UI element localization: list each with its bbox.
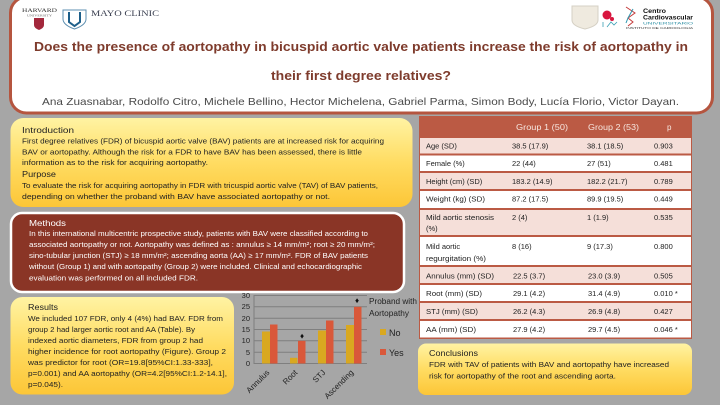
table labels: Weight (kg) (SD) [426, 194, 486, 204]
table p values: 0.046 * [654, 325, 678, 334]
text: methods body: associated aortopathy or not. Aortopathy was defined as : annulus ≥ 14 mm/m²; root ≥ 20 mm/m²; [29, 240, 375, 249]
logo: Centro Cardiovascular: Cardiovascular [643, 16, 694, 22]
text: results body: was predictor for root (OR=19.8[95%CI:1.33-333], [27, 358, 213, 367]
chart y axis labels: 25 [242, 302, 250, 311]
table group 2 values: 89.9 (19.5) [587, 194, 624, 204]
table header: Group 2 (53) [588, 123, 639, 132]
chart bars: with aortopathy [270, 307, 362, 364]
chart x axis labels: STJ [311, 368, 327, 384]
text: results body: group 2 had larger aortic root and AA (Table). By [28, 325, 195, 334]
table group 1 values: 27.9 (4.2) [513, 325, 546, 334]
table labels: STJ (mm) (SD) [426, 307, 479, 316]
chart y axis labels: 20 [242, 314, 250, 323]
logo: Centro Cardiovascular: UNIVERSITARIO [643, 20, 693, 26]
table labels: Mild aortic [426, 242, 460, 251]
text: methods body: In this international multicentric prospective study, patients with BAV were classified according to [29, 229, 368, 238]
table group 2 values: 29.7 (4.5) [588, 325, 621, 334]
table p values: 0.789 [654, 177, 673, 186]
logo: Harvard: UNIVERSITY [27, 14, 53, 18]
text: methods body [28, 229, 375, 282]
table header [516, 123, 672, 132]
chart bars: no aortopathy [262, 325, 354, 364]
table p values: 0.505 [654, 272, 673, 280]
chart legend [369, 297, 417, 358]
table group 1 values: 29.1 (4.2) [513, 289, 546, 298]
text: conclusions body: risk for aortopathy of the root and ascending aorta. [429, 372, 616, 380]
logo: Harvard: HARVARD [22, 8, 57, 14]
significance markers [300, 296, 359, 340]
table p values: 0.800 [654, 242, 673, 251]
chart y axis labels: 0 [246, 359, 250, 368]
logo: university seal [572, 6, 598, 29]
chart legend: Aortopathy [369, 309, 409, 318]
logo: red society mark [602, 10, 617, 27]
table group 1 values: 22 (44) [512, 159, 536, 168]
heading: introduction: Introduction [22, 125, 74, 135]
table labels: AA (mm) (SD) [426, 325, 477, 334]
table group 1 values: 8 (16) [512, 242, 532, 251]
chart y axis labels: 10 [242, 336, 250, 345]
chart legend: Proband with [369, 297, 417, 306]
table group 2 values: 23.0 (3.9) [588, 272, 621, 280]
table group 1 values: 2 (4) [512, 213, 528, 222]
significance markers: ♦ [300, 332, 304, 340]
table group 2 values: 26.9 (4.8) [588, 307, 621, 316]
text: results body: We included 107 FDR, only 4 (4%) had BAV. FDR from [28, 314, 223, 323]
table labels: (%) [426, 224, 438, 233]
text: methods body: evaluation was performed on all included FDR. [29, 274, 198, 282]
table labels: Root (mm) (SD) [426, 289, 483, 298]
text: conclusions body: FDR with TAV of patients with BAV and aortopathy have increased [429, 360, 669, 369]
panel: methods [11, 213, 404, 292]
authors: Ana Zuasnabar, Rodolfo Citro, Michele Bellino, Hector Michelena, Gabriel Parma, Simon Body, Lucía Florio, Victor Dayan. [42, 96, 679, 108]
logo: Centro Cardiovascular [626, 7, 694, 30]
text: introduction body [22, 136, 384, 167]
table p values [654, 142, 678, 334]
logo: Harvard [22, 8, 57, 30]
table group 2 values: 27 (51) [587, 159, 611, 168]
table p values: 0.010 * [654, 289, 678, 298]
table group 1 values: 87.2 (17.5) [512, 194, 549, 204]
table group 1 values: 38.5 (17.9) [512, 142, 549, 150]
text: methods body: sino-tubular junction (STJ) ≥ 18 mm/m²; ascending aorta (AA) ≥ 17 mm/m². FDR of BAV patients [29, 251, 368, 260]
title: their first degree relatives? [271, 69, 451, 83]
table rows [420, 138, 691, 338]
significance markers: ♦ [355, 296, 359, 305]
table group 1 values: 183.2 (14.9) [512, 177, 553, 186]
table group 2 values: 9 (17.3) [587, 242, 613, 251]
table labels [426, 142, 495, 334]
text: results body: indexed aortic diameters, FDR from group 2 had [28, 336, 203, 345]
logo: Mayo Clinic: MAYO CLINIC [91, 9, 159, 18]
title [34, 40, 688, 83]
chart y axis labels: 5 [246, 348, 250, 357]
panel: results [10, 297, 234, 394]
text: results body: p=0.001) and AA aortopathy (OR=4.2[95%CI:1.2-14.1], [28, 369, 227, 378]
table group 1 values: 22.5 (3.7) [513, 272, 546, 280]
table header: p [667, 123, 672, 132]
table labels: Mild aortic stenosis [426, 213, 494, 222]
table labels: Annulus (mm) (SD) [426, 272, 495, 280]
logo: Centro Cardiovascular: INSTITUTO DE CARDIOLOGIA [626, 26, 693, 30]
text: introduction body: BAV or aortopathy. Although the risk for a FDR to have BAV has been assessed, there is little [22, 148, 362, 156]
table group 2 values [587, 142, 628, 334]
panel: introduction and purpose [10, 118, 412, 207]
heading: conclusions: Conclusions [429, 348, 478, 358]
table p values: 0.535 [654, 213, 673, 222]
panel: conclusions [418, 344, 692, 395]
chart legend: No [389, 328, 401, 338]
table labels: Female (%) [426, 159, 465, 168]
chart x axis labels: Annulus [245, 368, 271, 395]
text: introduction body: information as to the risk for acquiring aortopathy. [22, 158, 208, 167]
panel: header [10, 0, 712, 113]
chart y axis labels: 30 [242, 291, 250, 300]
text: purpose body [22, 181, 378, 201]
text: results body [27, 314, 227, 389]
text: results body: p=0.045). [28, 380, 63, 389]
heading: methods: Methods [29, 218, 66, 228]
table labels: Age (SD) [426, 142, 457, 150]
table group 2 values: 38.1 (18.5) [587, 142, 624, 150]
chart gridlines and axes [254, 295, 367, 364]
table group 1 values: 26.2 (4.3) [513, 307, 546, 316]
text: purpose body: depending on whether the proband with BAV have associated aortopathy or not. [22, 192, 330, 201]
text: introduction body: First degree relatives (FDR) of bicuspid aortic valve (BAV) patients are at increased risk for acquiring [22, 136, 384, 146]
table p values: 0.449 [654, 194, 673, 204]
logo: Centro Cardiovascular: Centro [643, 9, 666, 15]
table group 2 values: 31.4 (4.9) [588, 289, 621, 298]
chart x axis labels [245, 368, 355, 401]
table group 2 values: 182.2 (21.7) [587, 177, 628, 186]
chart y axis labels [242, 291, 250, 368]
table labels: regurgitation (%) [426, 254, 487, 263]
table p values: 0.903 [654, 142, 673, 150]
table group 1 values [512, 142, 553, 334]
text: results body: higher incidence for root aortopathy (Figure). Group 2 [28, 347, 226, 356]
table group 2 values: 1 (1.9) [587, 213, 609, 222]
text: methods body: without (Group 1) and with aortopathy (Group 2) were included. Clinical and echocardiographic [28, 262, 362, 271]
table p values: 0.481 [654, 159, 673, 168]
heading: purpose: Purpose [22, 169, 56, 179]
logo: Mayo Clinic [63, 9, 159, 29]
text: conclusions body [429, 360, 669, 380]
chart y axis labels: 15 [242, 325, 250, 334]
chart legend: Yes [389, 348, 404, 358]
bar chart: aortopathy by segment [242, 291, 417, 401]
chart x axis labels: Root [281, 368, 300, 386]
text: purpose body: To evaluate the risk for acquiring aortopathy in FDR with tricuspid aortic valve (TAV) of BAV patients, [22, 181, 378, 190]
table labels: Height (cm) (SD) [426, 177, 483, 186]
heading: results: Results [28, 302, 58, 312]
table header: Group 1 (50) [516, 123, 568, 132]
table: group comparison [419, 116, 692, 339]
table p values: 0.427 [654, 307, 673, 316]
title: Does the presence of aortopathy in bicuspid aortic valve patients increase the risk of aortopathy in [34, 40, 688, 54]
chart x axis labels: Ascending [323, 368, 355, 401]
